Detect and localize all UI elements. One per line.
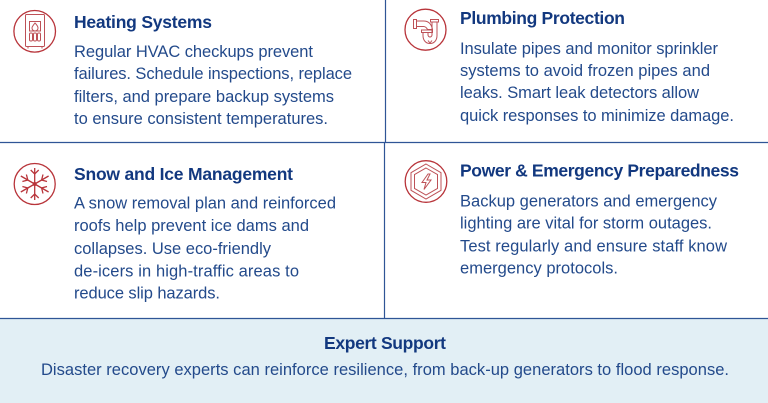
text: heating body: filters, and prepare backup systems <box>74 88 334 106</box>
text: snow body: roofs help prevent ice dams and <box>74 217 309 235</box>
text: heating body: to ensure consistent temperatures. <box>74 110 328 128</box>
text: snow body: collapses. Use eco-friendly <box>74 240 272 258</box>
heading: plumbing protection: Plumbing Protection <box>460 8 625 28</box>
heading: expert support: Expert Support <box>324 333 446 353</box>
panel: heating systems <box>14 10 352 128</box>
text: power body: lighting are vital for storm outages. <box>460 214 712 232</box>
icon: pipe trap <box>405 9 446 50</box>
text: snow body: A snow removal plan and reinforced <box>74 194 336 212</box>
text: snow body: reduce slip hazards. <box>74 284 220 302</box>
text: expert support body: Disaster recovery experts can reinforce resilience, from back-up generators to flood response. <box>41 361 729 379</box>
text: heating body: failures. Schedule inspections, replace <box>74 65 352 83</box>
text: power body: Test regularly and ensure staff know <box>460 238 727 256</box>
text: plumbing body: Insulate pipes and monitor sprinkler <box>460 40 718 58</box>
text: snow body: de-icers in high-traffic areas to <box>74 262 299 280</box>
text: snow body <box>74 194 336 302</box>
heading: snow and ice management: Snow and Ice Management <box>74 164 293 184</box>
panel: power and emergency preparedness <box>405 160 739 278</box>
text: heating body: Regular HVAC checkups prevent <box>74 43 313 61</box>
icon: heating unit <box>14 10 56 52</box>
text: plumbing body <box>460 40 734 125</box>
text: power body: Backup generators and emergency <box>460 192 718 210</box>
heading: power and emergency preparedness: Power & Emergency Preparedness <box>460 160 739 180</box>
icon: hexagon lightning bolt <box>405 161 447 202</box>
text: power body: emergency protocols. <box>460 260 618 278</box>
text: plumbing body: leaks. Smart leak detectors allow <box>460 84 699 102</box>
text: heating body <box>74 43 352 128</box>
panel: plumbing protection <box>405 8 734 125</box>
panel: expert support <box>41 333 729 379</box>
panel: snow and ice management <box>14 164 336 302</box>
text: plumbing body: quick responses to minimize damage. <box>460 107 734 125</box>
text: power body <box>460 192 727 278</box>
text: plumbing body: systems to avoid frozen pipes and <box>460 62 710 80</box>
heading: heating systems: Heating Systems <box>74 12 212 32</box>
icon: snowflake <box>14 164 55 204</box>
